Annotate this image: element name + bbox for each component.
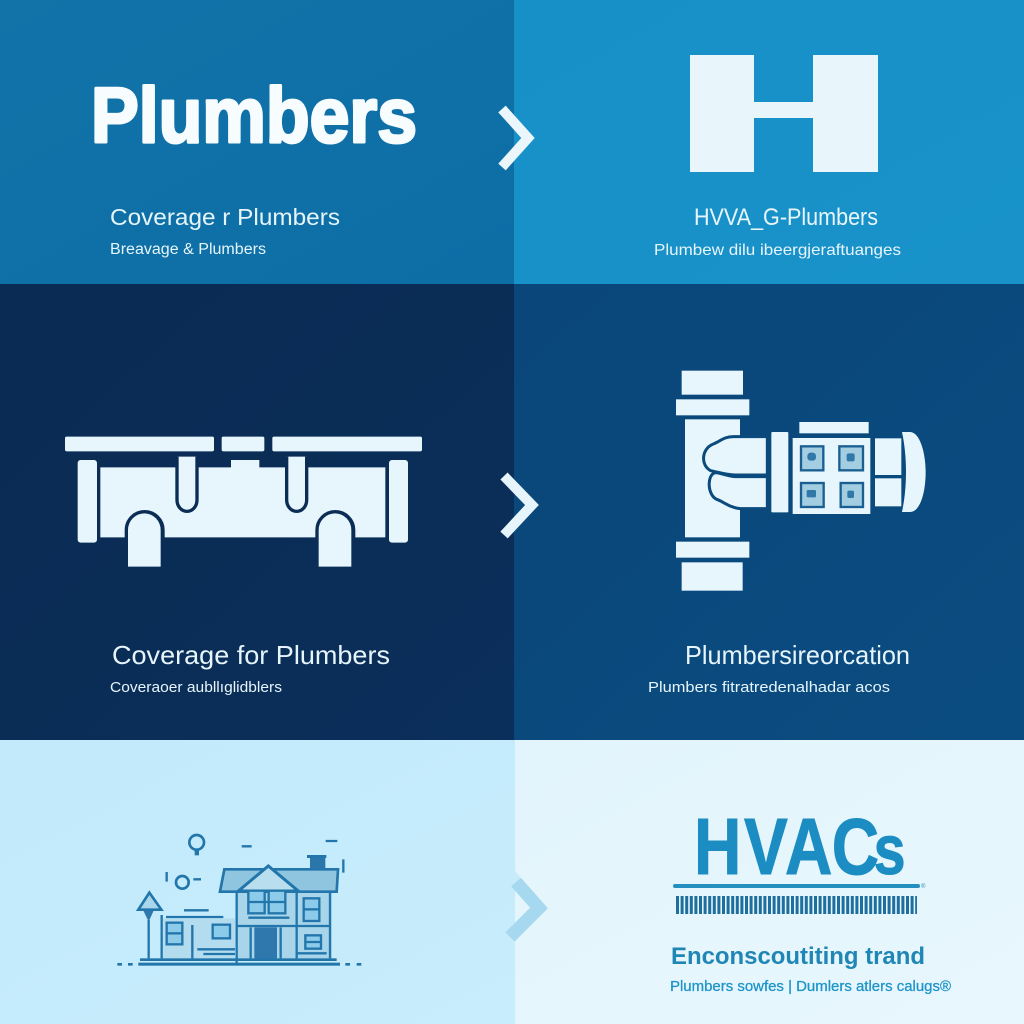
panel: HVAC H (514, 0, 1024, 284)
caption: coveraoer: Coveraoer aubllıglidblers (110, 679, 282, 696)
subheading: coverage: Coverage r Plumbers (110, 204, 340, 230)
subheading: enconscoutiting trand: Enconscoutiting trand (671, 943, 925, 970)
icon: pipe tee with valve (676, 371, 926, 591)
panel: HVACs brand (515, 740, 1024, 1024)
icon: horizontal pipe (65, 437, 422, 567)
caption: breavage: Breavage & Plumbers (110, 241, 266, 258)
heading: HVACs: HVAC (694, 802, 879, 891)
panel: house (0, 740, 530, 1024)
panel: coverage for plumbers (0, 284, 514, 740)
icon: house illustration (117, 835, 361, 966)
heading: HVACs: s (874, 811, 905, 889)
panel: pipe fitting (514, 284, 1024, 740)
panel: plumbers title (0, 0, 514, 284)
subheading: coverage for plumbers: Coverage for Plumbers (112, 640, 390, 670)
subheading: HVAC plumbers: HVVA_G-Plumbers (694, 204, 878, 231)
icon: H block (690, 55, 878, 172)
caption: plumbers sowfes: Plumbers sowfes | Dumlers atlers calugs® (670, 978, 951, 995)
caption: plumbew: Plumbew dilu ibeergjeraftuanges (654, 242, 901, 259)
arrow: top (502, 109, 528, 167)
heading: Plumbers: Plumbers (91, 71, 417, 159)
arrow: bottom (510, 882, 539, 937)
arrow: middle (504, 476, 532, 535)
registered mark: ® (921, 883, 926, 890)
rule (673, 884, 920, 888)
subheading: plumbersireorcation: Plumbersireorcation (685, 640, 910, 670)
barcode strip (676, 896, 917, 914)
caption: plumbers fitratre: Plumbers fitratredenalhadar acos (648, 679, 890, 696)
